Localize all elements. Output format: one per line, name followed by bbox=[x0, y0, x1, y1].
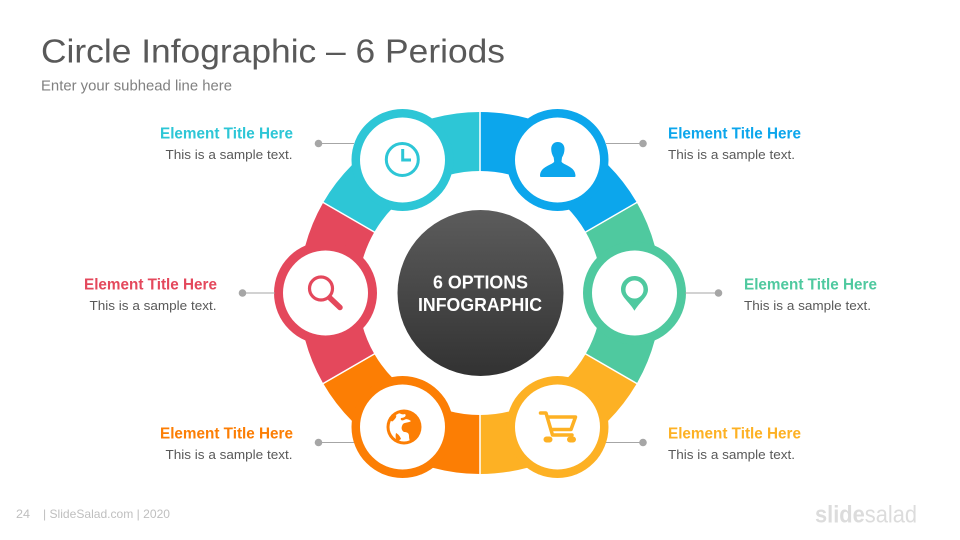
segment: green period bbox=[583, 202, 686, 384]
callout: green element: This is a sample text. bbox=[744, 299, 871, 313]
callout: yellow element: This is a sample text. bbox=[668, 448, 795, 462]
callout: orange element bbox=[160, 426, 354, 462]
icon: map pin bbox=[621, 276, 648, 311]
callout: teal element: This is a sample text. bbox=[166, 148, 292, 162]
segment: teal period bbox=[323, 109, 480, 232]
callout: green element bbox=[685, 276, 877, 313]
title: Circle Infographic – 6 Periods bbox=[41, 34, 505, 70]
callout: red element: This is a sample text. bbox=[90, 299, 216, 313]
callout: red element: Element Title Here bbox=[84, 276, 217, 294]
callout: yellow element bbox=[606, 426, 801, 462]
segment: blue period bbox=[480, 109, 637, 232]
icon: shopping cart bbox=[540, 413, 576, 440]
center text: INFOGRAPHIC bbox=[418, 294, 542, 315]
segment: yellow period bbox=[480, 354, 637, 478]
callout: blue element: Element Title Here bbox=[668, 126, 801, 142]
icon: globe bbox=[386, 410, 422, 444]
subhead: Enter your subhead line here bbox=[41, 78, 232, 94]
segment: orange period bbox=[323, 354, 480, 478]
callout: blue element bbox=[606, 126, 801, 162]
callout: blue element: This is a sample text. bbox=[668, 148, 795, 162]
logo: slidesalad: slidesalad bbox=[815, 502, 917, 528]
callout: red element bbox=[84, 276, 275, 313]
footer source: | SlideSalad.com | 2020 bbox=[43, 507, 170, 521]
callout: teal element bbox=[160, 126, 354, 162]
callout: teal element: Element Title Here bbox=[160, 126, 293, 142]
callout: orange element: This is a sample text. bbox=[166, 448, 292, 462]
circle infographic bbox=[274, 109, 686, 478]
segment: red period bbox=[274, 202, 377, 384]
icon: magnifier bbox=[310, 277, 340, 308]
footer page number: 24 bbox=[16, 507, 30, 521]
callout: orange element: Element Title Here bbox=[160, 426, 293, 442]
center text: 6 OPTIONS bbox=[433, 272, 528, 292]
center circle bbox=[398, 210, 564, 376]
callout: yellow element: Element Title Here bbox=[668, 426, 801, 442]
callout: green element: Element Title Here bbox=[744, 276, 877, 294]
icon: clock bbox=[386, 144, 418, 176]
icon: person bbox=[540, 142, 576, 177]
